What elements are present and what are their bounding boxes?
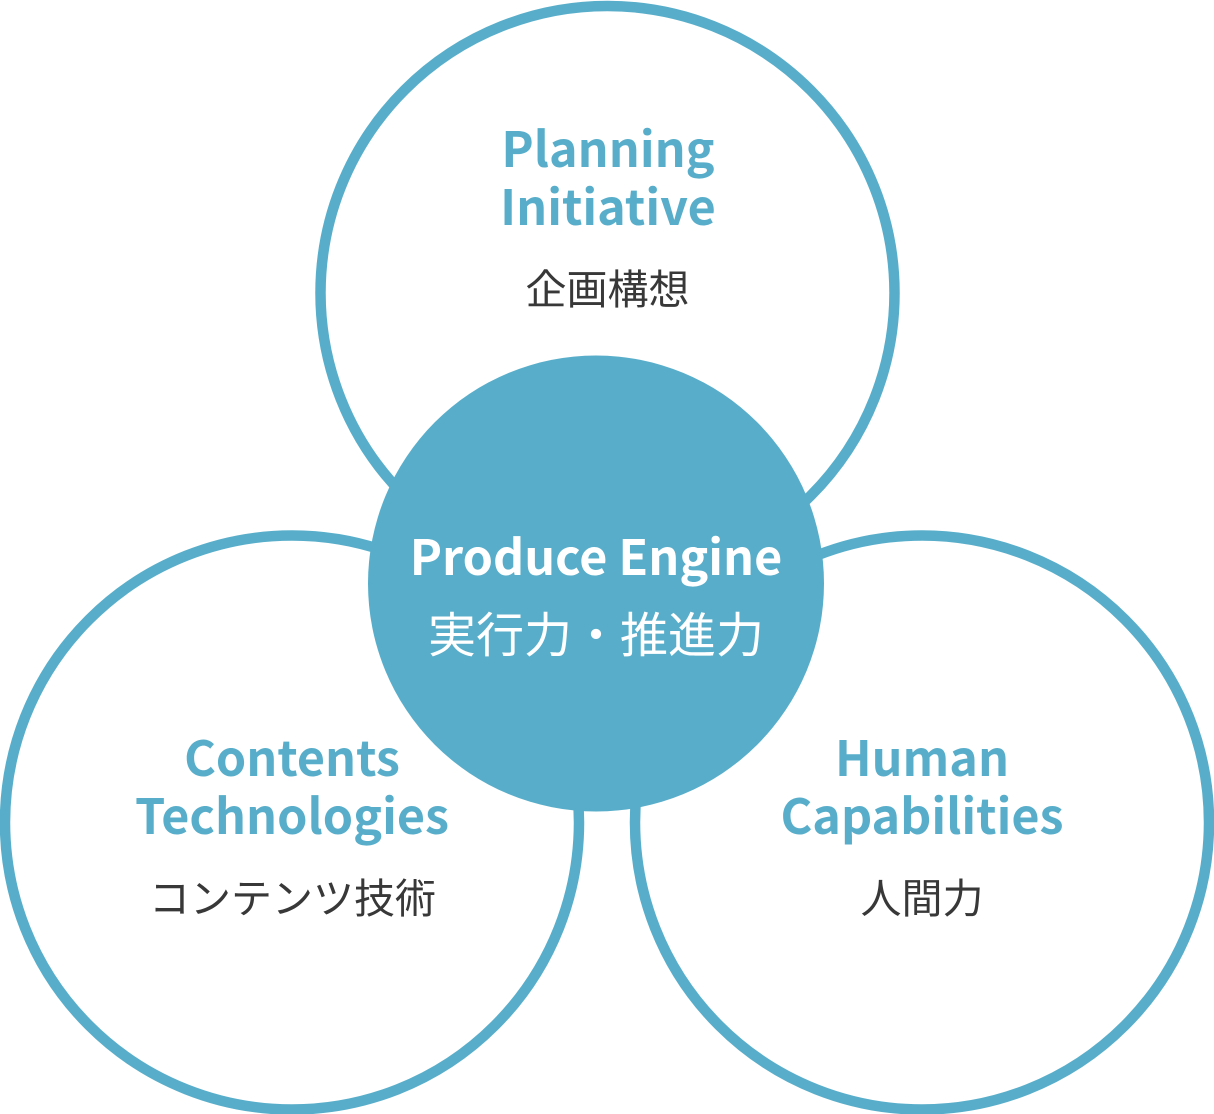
circle: Contents Technologies [5, 536, 579, 1110]
circle: Human Capabilities: Capabilities [780, 778, 1064, 848]
center circle: Produce Engine [368, 356, 824, 812]
center circle: Produce Engine: 実行力・推進力 [428, 596, 764, 666]
circle: Contents Technologies: Technologies [135, 778, 449, 848]
circle: Planning Initiative: 企画構想 [526, 256, 690, 316]
circle: Human Capabilities: 人間力 [860, 865, 984, 925]
circle: Planning Initiative: Initiative [500, 169, 716, 239]
circle: Planning Initiative: Planning [501, 111, 715, 181]
circle: Contents Technologies: Contents [184, 720, 400, 790]
circle: Planning Initiative [320, 6, 894, 580]
circle: Contents Technologies: コンテンツ技術 [149, 865, 436, 925]
circle: Human Capabilities [635, 536, 1209, 1110]
center circle: Produce Engine: Produce Engine [410, 519, 782, 589]
circle: Human Capabilities: Human [835, 720, 1009, 790]
